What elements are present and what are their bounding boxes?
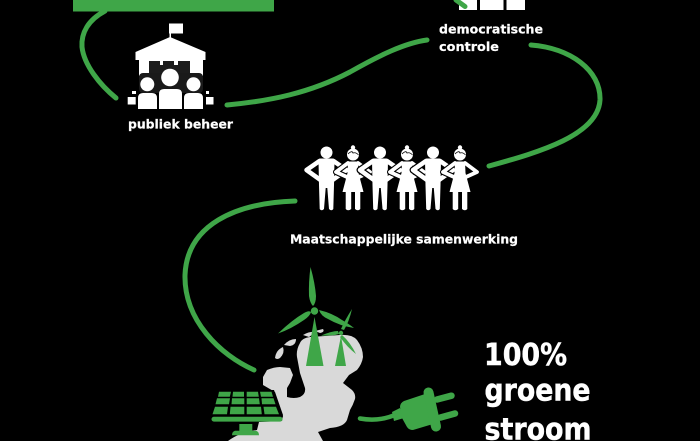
top green banner [73,0,274,12]
map of the Netherlands [228,329,363,441]
icon: large wind turbine [278,267,354,366]
icon: democratic control ballots [456,0,525,10]
label: democratische controle: democratische [439,22,543,36]
heading: 100% groene stroom [484,338,592,441]
icon: public building with people [128,24,214,109]
arrow: samenwerking to groene stroom [185,201,295,370]
heading: 100% groene stroom: groene [484,374,590,408]
label: democratische controle: controle [439,39,499,54]
icon: power plug with cable [360,392,455,430]
arrow: banner to publiek beheer [82,11,116,98]
label: Maatschappelijke samenwerking: Maatschappelijke samenwerking [290,232,518,246]
arrow: publiek beheer to democratische controle [227,40,427,105]
arrow: democratische controle to samenwerking [489,45,600,166]
label: democratische controle [439,22,543,54]
icon: small wind turbine [321,309,356,366]
label: publiek beheer: publiek beheer [128,116,234,132]
icon: solar panel [210,390,283,435]
icon: row of people holding arms [306,145,477,210]
heading: 100% groene stroom: 100% [484,338,567,373]
